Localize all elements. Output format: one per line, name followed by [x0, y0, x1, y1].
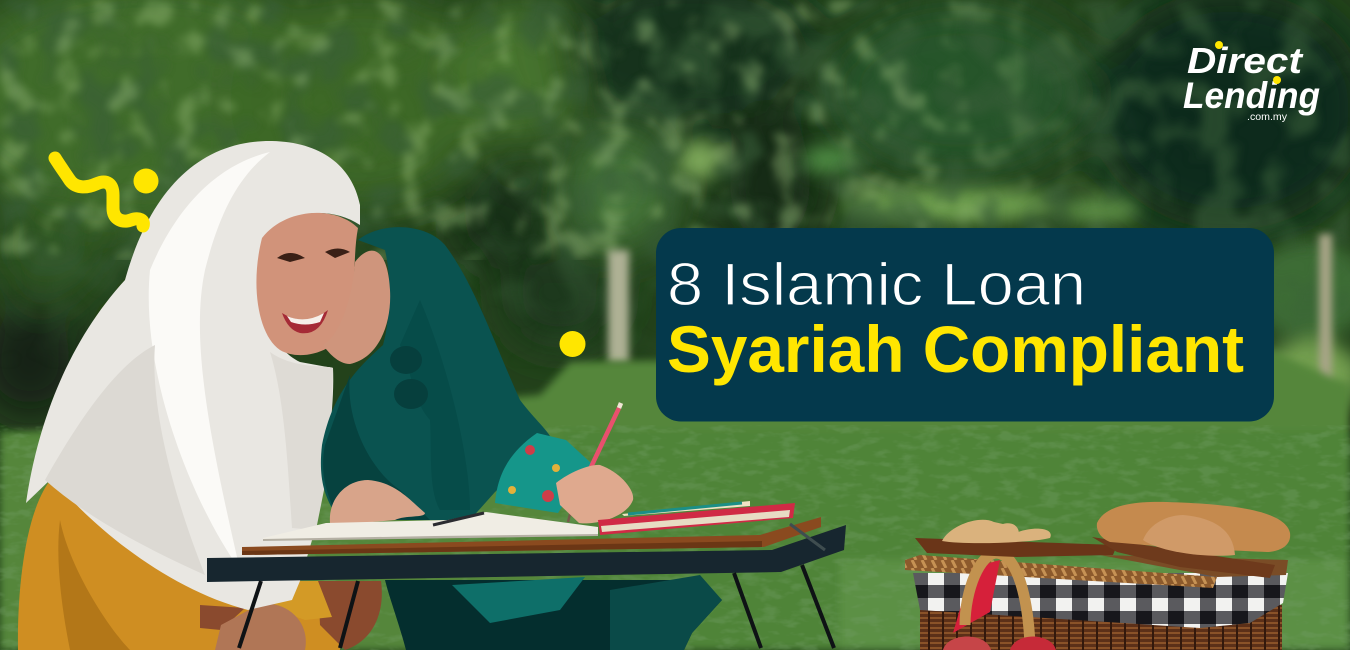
title panel	[656, 228, 1274, 422]
logo word Lending: Lending	[1183, 75, 1320, 116]
logo: Direct Lending	[1183, 40, 1320, 123]
table: wooden top	[242, 517, 821, 555]
woman: white hijab	[26, 141, 360, 610]
girl: hands	[330, 465, 633, 525]
bread and wooden boards	[915, 502, 1290, 578]
girl: lower dress	[385, 575, 722, 650]
logo domain: .com.my	[1247, 111, 1288, 123]
logo word Direct: Direct	[1187, 40, 1304, 81]
open notebook	[263, 512, 598, 541]
red books and pencil	[598, 501, 795, 535]
pencil	[568, 403, 621, 522]
girl: floral sleeve	[495, 433, 591, 513]
title line one: 8 Islamic Loan	[667, 251, 1086, 318]
woman: face	[256, 213, 358, 355]
woman: arm and hand	[200, 581, 382, 650]
yellow dot by squiggle	[134, 168, 158, 194]
picnic basket	[905, 553, 1288, 650]
title line two: Syariah Compliant	[667, 312, 1244, 386]
table: dark frame and legs	[207, 524, 846, 648]
girl: green hijab and dress	[321, 227, 552, 520]
yellow squiggle	[55, 158, 158, 226]
yellow dot	[560, 331, 586, 357]
woman: mustard dress	[18, 478, 382, 650]
